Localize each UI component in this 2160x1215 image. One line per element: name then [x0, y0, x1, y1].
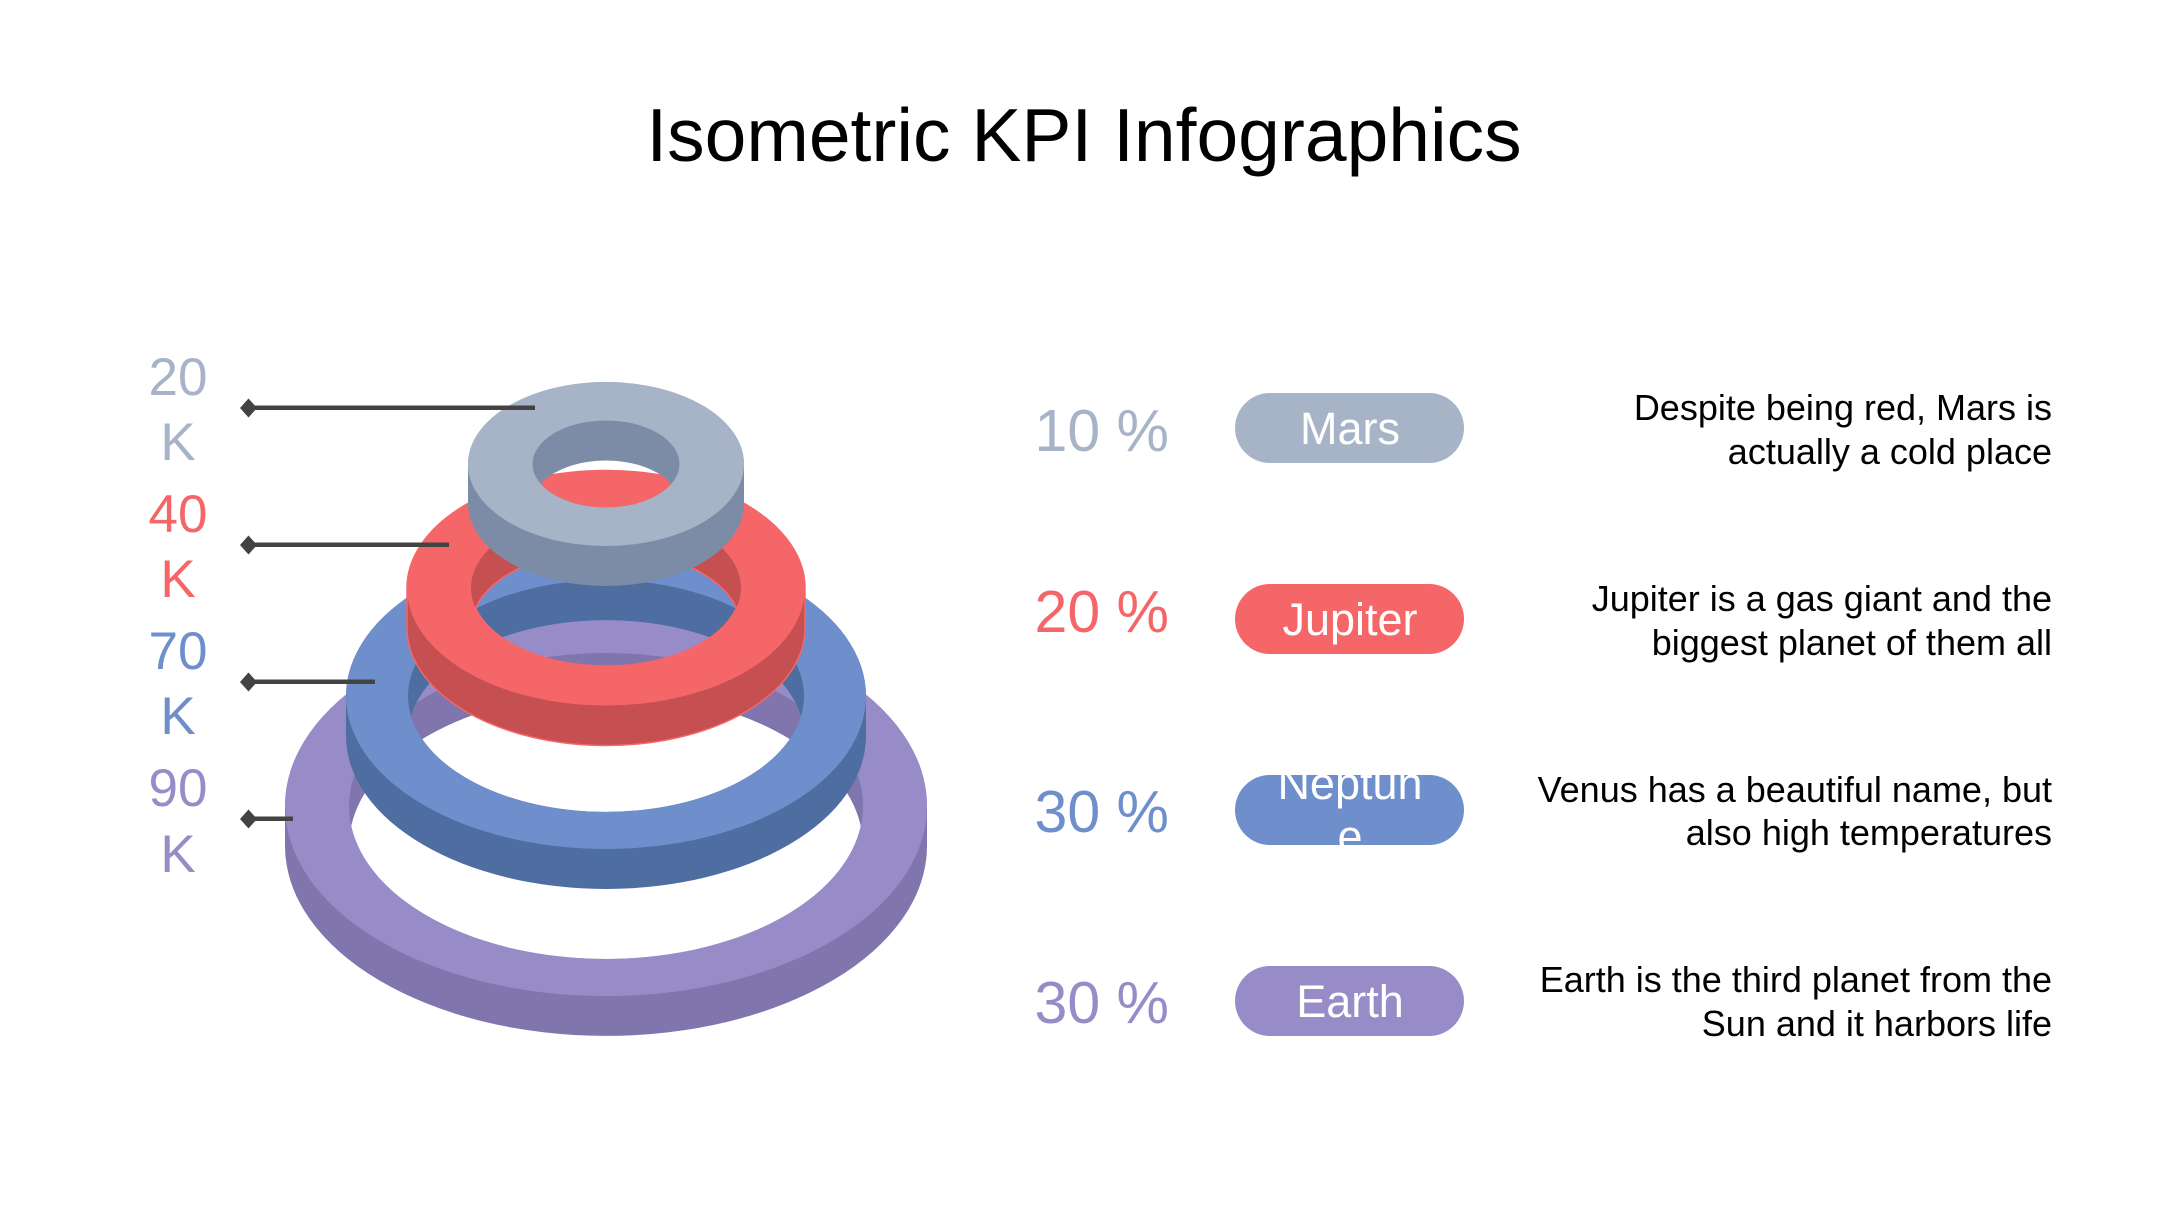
pill: Earth	[1235, 966, 1464, 1036]
description: Neptune	[1538, 769, 2052, 853]
label: 70 K	[149, 622, 207, 746]
label: 70 K: 70	[149, 622, 207, 681]
ring: gray 20K	[468, 382, 744, 586]
pill: Mars: Mars	[1300, 403, 1400, 454]
label: 20 K: 20	[149, 348, 207, 407]
percent: 30 %: 30 %	[1035, 779, 1169, 845]
percent: 20 %: 20 %	[1035, 579, 1169, 645]
label: 70 K: K	[160, 687, 196, 746]
description: Neptune: also high temperatures	[1686, 812, 2052, 853]
description: Jupiter: biggest planet of them all	[1652, 622, 2052, 663]
leader line: 40K	[240, 536, 449, 554]
pill: Jupiter	[1235, 584, 1464, 654]
ring: blue 70K	[346, 543, 866, 889]
pill: Earth: Earth	[1296, 976, 1404, 1027]
pill: Jupiter: Jupiter	[1282, 594, 1418, 645]
title: Isometric KPI Infographics	[646, 93, 1522, 177]
ring: purple 90K	[285, 616, 927, 1036]
description: Jupiter: Jupiter is a gas giant and the	[1592, 578, 2052, 619]
description: Earth	[1540, 959, 2052, 1044]
label: 20 K	[149, 348, 207, 472]
description: Earth: Earth is the third planet from the	[1540, 959, 2052, 1000]
chart: stacked isometric rings	[285, 382, 927, 1036]
description: Mars: Despite being red, Mars is	[1634, 387, 2052, 428]
label: 90 K: 90	[149, 759, 207, 818]
ring: red 40K	[407, 470, 805, 746]
pill: Neptune: e	[1337, 811, 1363, 862]
label: 90 K	[149, 759, 207, 884]
label: 90 K: K	[160, 825, 196, 884]
label: 40 K: 40	[149, 485, 207, 544]
pill: Neptune: Neptun	[1277, 758, 1423, 809]
percent: 30 %: 30 %	[1035, 970, 1169, 1036]
description: Mars: actually a cold place	[1728, 431, 2052, 472]
pill: Mars	[1235, 393, 1464, 463]
row: Earth	[1035, 959, 2052, 1044]
pill: Neptune	[1235, 775, 1464, 845]
description: Jupiter	[1592, 578, 2052, 663]
row: Mars	[1035, 387, 2052, 472]
leader line: 20K	[240, 398, 535, 418]
label: 20 K: K	[160, 413, 196, 472]
description: Mars	[1634, 387, 2052, 472]
description: Neptune: Venus has a beautiful name, but	[1538, 769, 2052, 810]
label: 40 K	[149, 485, 207, 609]
percent: 10 %: 10 %	[1035, 398, 1169, 464]
description: Earth: Sun and it harbors life	[1702, 1003, 2052, 1044]
leader line: 70K	[240, 672, 375, 692]
label: 40 K: K	[160, 550, 196, 609]
row: Jupiter	[1035, 578, 2052, 663]
row: Neptune	[1036, 775, 2052, 852]
leader line: 90K	[240, 810, 293, 828]
